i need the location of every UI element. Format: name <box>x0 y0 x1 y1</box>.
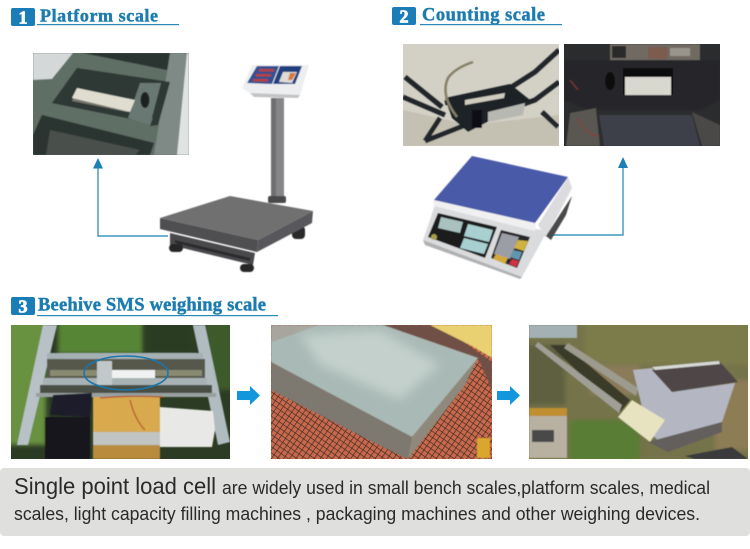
photo: beehive on scale in field <box>525 320 750 462</box>
callout: blue ellipse around load cell <box>84 356 168 390</box>
heading: Platform scale: 1 <box>18 8 28 28</box>
text: second line: scales, light capacity filling machines , packaging machines and other weighing devices. <box>14 504 700 524</box>
arrow: platform scale to photo <box>93 158 168 236</box>
heading: Counting scale <box>392 6 562 26</box>
heading: Beehive SMS weighing scale: Beehive SMS weighing scale <box>38 296 266 316</box>
photo: beehive scale frame on grass <box>6 320 235 459</box>
text: lead phrase: Single point load cell <box>14 473 216 499</box>
heading: Counting scale: Counting scale <box>422 6 545 26</box>
panel: description <box>0 468 750 536</box>
illustration: platform scale <box>160 65 313 272</box>
illustration: counting scale <box>423 156 572 279</box>
photo: counting scale installed cell <box>564 44 720 146</box>
photo: platform scale load cell <box>33 53 189 155</box>
heading: Platform scale <box>11 6 179 28</box>
arrow: counting scale to photo <box>543 157 628 235</box>
photo: steel plate on mesh table <box>271 325 492 459</box>
heading: Beehive SMS weighing scale: 3 <box>18 296 28 316</box>
heading: Platform scale: Platform scale <box>40 6 158 26</box>
text: first line: are widely used in small bench scales,platform scales, medical <box>222 478 710 498</box>
heading: Counting scale: 2 <box>400 6 408 26</box>
photo: counting scale frame on floor <box>403 44 559 146</box>
arrow: step one to step two <box>237 386 260 405</box>
arrow: step two to step three <box>497 386 520 405</box>
